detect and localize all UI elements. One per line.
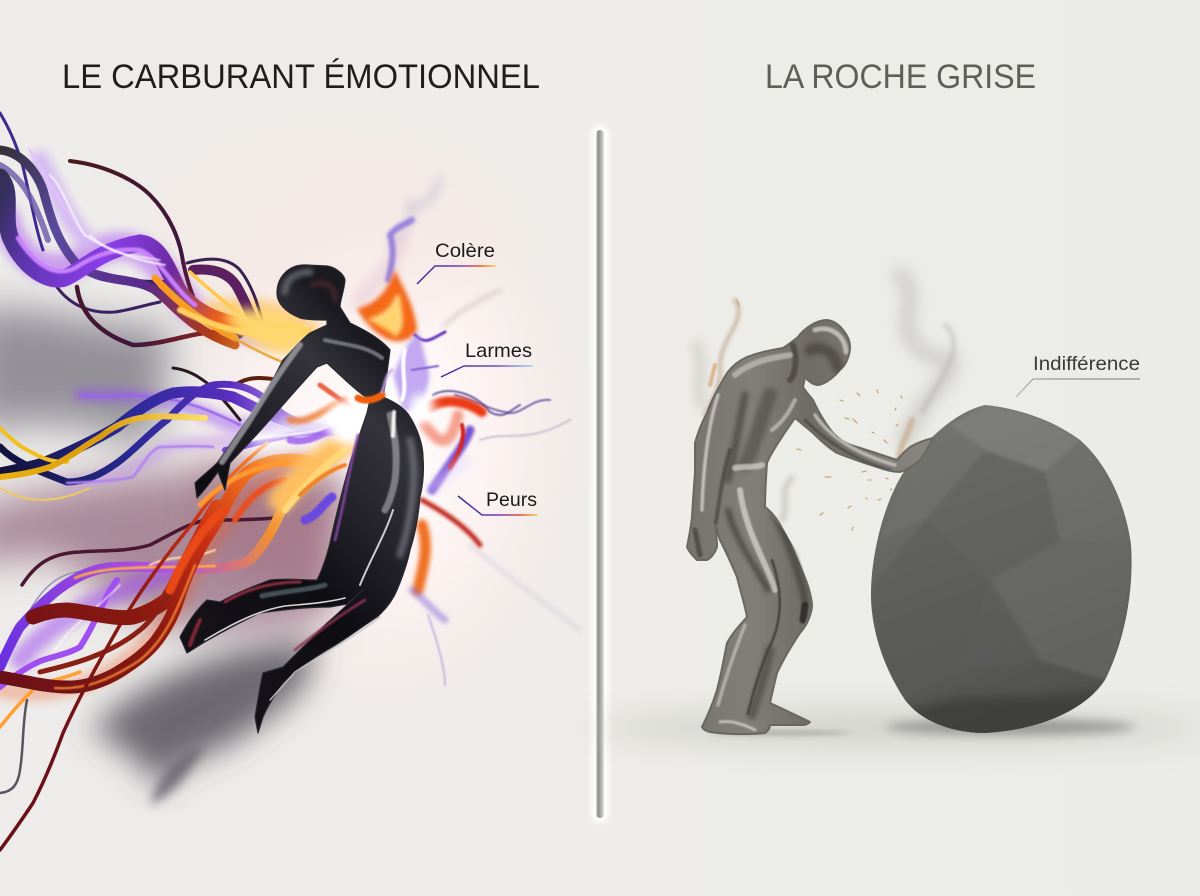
ground shadow under man and rock — [590, 714, 1200, 742]
contact shadow — [885, 719, 1135, 735]
ribbons: upper purple and flame strand bundle — [0, 113, 310, 365]
title: le carburant émotionnel: LE CARBURANT ÉMOTIONNEL — [62, 58, 540, 96]
man ground shadow — [710, 730, 850, 736]
central flames between arm and body — [260, 385, 355, 520]
woman: body — [180, 265, 423, 733]
explosion glow — [160, 120, 600, 740]
ribbons: soft purple and flame halos — [0, 160, 330, 693]
smoke wisps — [697, 275, 954, 520]
central white-hot core — [326, 394, 435, 446]
wall shadow of ribbons and figure — [0, 308, 345, 805]
ribbons: lower red and violet strand bundle — [0, 443, 325, 850]
title: la roche grise: LA ROCHE GRISE — [765, 58, 1036, 96]
background: right panel — [600, 0, 1200, 896]
sparks at hand — [737, 300, 902, 530]
explosion flames around chest — [360, 180, 580, 685]
warm glow at top of the left panel — [150, 130, 510, 330]
callout: larmes: Larmes — [465, 340, 532, 362]
woman: chrome highlights — [190, 272, 414, 700]
background: left panel — [0, 0, 600, 896]
ribbons: middle blue and yellow strand bundle — [0, 368, 350, 500]
central divider bar — [591, 125, 609, 823]
callout: peurs — [458, 489, 538, 515]
callout: indifférence: Indifférence — [1033, 353, 1140, 375]
callout: colère — [417, 240, 496, 284]
flame glow on upper ribbon bundle — [225, 309, 305, 355]
bent man in grey chrome — [687, 320, 933, 734]
boulder — [871, 405, 1132, 740]
callout: colère: Colère — [435, 240, 495, 262]
man: muscle shading — [695, 329, 895, 730]
callout: indifférence — [1016, 353, 1140, 397]
boulder: facets — [871, 405, 1132, 740]
callout: peurs: Peurs — [486, 489, 537, 511]
man: body — [687, 320, 933, 734]
floating woman in black chrome — [180, 265, 423, 733]
callout: larmes — [441, 340, 533, 377]
